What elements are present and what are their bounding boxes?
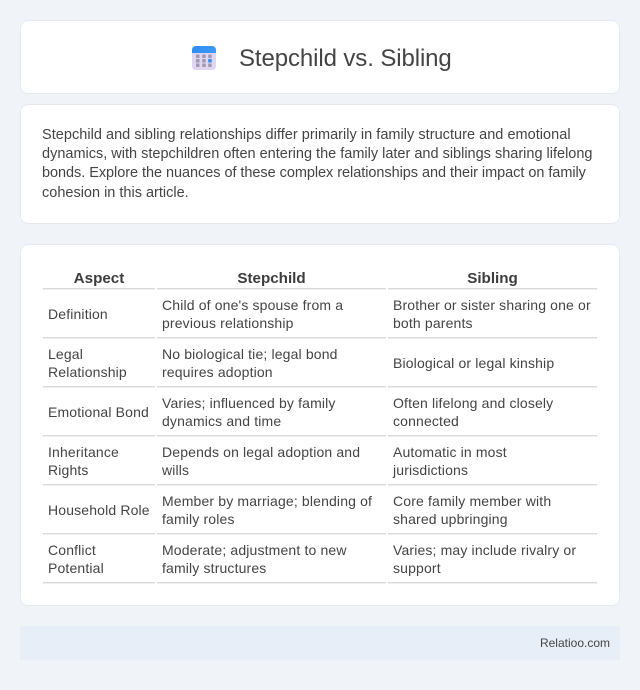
row: Inheritance Rights: Inheritance xyxy=(48,444,119,460)
row: Definition: Definition xyxy=(48,306,108,322)
table header: Sibling: Sibling xyxy=(467,270,518,287)
row: Inheritance Rights: Automatic in most xyxy=(393,444,507,460)
row: Definition: Brother or sister sharing one or xyxy=(393,297,591,313)
row: Emotional Bond: connected xyxy=(393,413,459,429)
row: Conflict Potential: family structures xyxy=(162,560,266,576)
intro text xyxy=(42,127,592,201)
row: Conflict Potential: Potential xyxy=(48,560,104,576)
heading: Stepchild vs. Sibling xyxy=(239,45,452,72)
title panel xyxy=(20,20,620,94)
row: Inheritance Rights xyxy=(48,444,507,478)
row: Legal Relationship: Relationship xyxy=(48,364,127,380)
comparison table xyxy=(43,270,597,584)
row: Definition: previous relationship xyxy=(162,315,294,331)
intro text: cohesion in this article. xyxy=(42,185,189,201)
row: Household Role: family roles xyxy=(162,511,235,527)
footer text: Relatioo.com xyxy=(540,636,610,650)
row: Conflict Potential xyxy=(48,542,576,576)
row: Emotional Bond: Often lifelong and closely xyxy=(393,395,553,411)
intro text: dynamics, with stepchildren often entering the family later and siblings sharing lifelong xyxy=(42,146,592,162)
row: Emotional Bond: Varies; influenced by family xyxy=(162,395,336,411)
row: Definition: Child of one's spouse from a xyxy=(162,297,343,313)
row: Inheritance Rights: Rights xyxy=(48,462,89,478)
row: Legal Relationship: Biological or legal kinship xyxy=(393,355,554,371)
row: Legal Relationship xyxy=(48,346,554,380)
comparison table panel xyxy=(20,244,620,606)
row: Conflict Potential: Conflict xyxy=(48,542,96,558)
row: Emotional Bond: Emotional Bond xyxy=(48,404,149,420)
row: Legal Relationship: Legal xyxy=(48,346,83,362)
table header: Stepchild: Stepchild xyxy=(237,270,306,287)
row: Household Role xyxy=(48,493,551,527)
table header: Aspect: Aspect xyxy=(74,270,124,287)
row: Inheritance Rights: Depends on legal adoption and xyxy=(162,444,360,460)
row: Legal Relationship: No biological tie; legal bond xyxy=(162,346,338,362)
footer bar xyxy=(20,626,620,660)
row: Legal Relationship: requires adoption xyxy=(162,364,273,380)
row: Conflict Potential: Moderate; adjustment to new xyxy=(162,542,347,558)
row: Inheritance Rights: wills xyxy=(162,462,189,478)
intro text: bonds. Explore the nuances of these complex relationships and their impact on family xyxy=(42,165,586,181)
row: Emotional Bond xyxy=(48,395,554,429)
icon: calendar xyxy=(192,46,216,70)
row: Inheritance Rights: jurisdictions xyxy=(393,462,468,478)
intro text: Stepchild and sibling relationships differ primarily in family structure and emotional xyxy=(42,127,571,143)
row: Household Role: Household Role xyxy=(48,502,150,518)
row: Conflict Potential: Varies; may include rivalry or xyxy=(393,542,576,558)
row: Household Role: shared upbringing xyxy=(393,511,508,527)
row: Emotional Bond: dynamics and time xyxy=(162,413,281,429)
row: Conflict Potential: support xyxy=(393,560,441,576)
intro text panel xyxy=(20,104,620,224)
row: Definition: both parents xyxy=(393,315,473,331)
row: Household Role: Core family member with xyxy=(393,493,551,509)
row: Definition xyxy=(48,297,591,331)
row: Household Role: Member by marriage; blending of xyxy=(162,493,372,509)
